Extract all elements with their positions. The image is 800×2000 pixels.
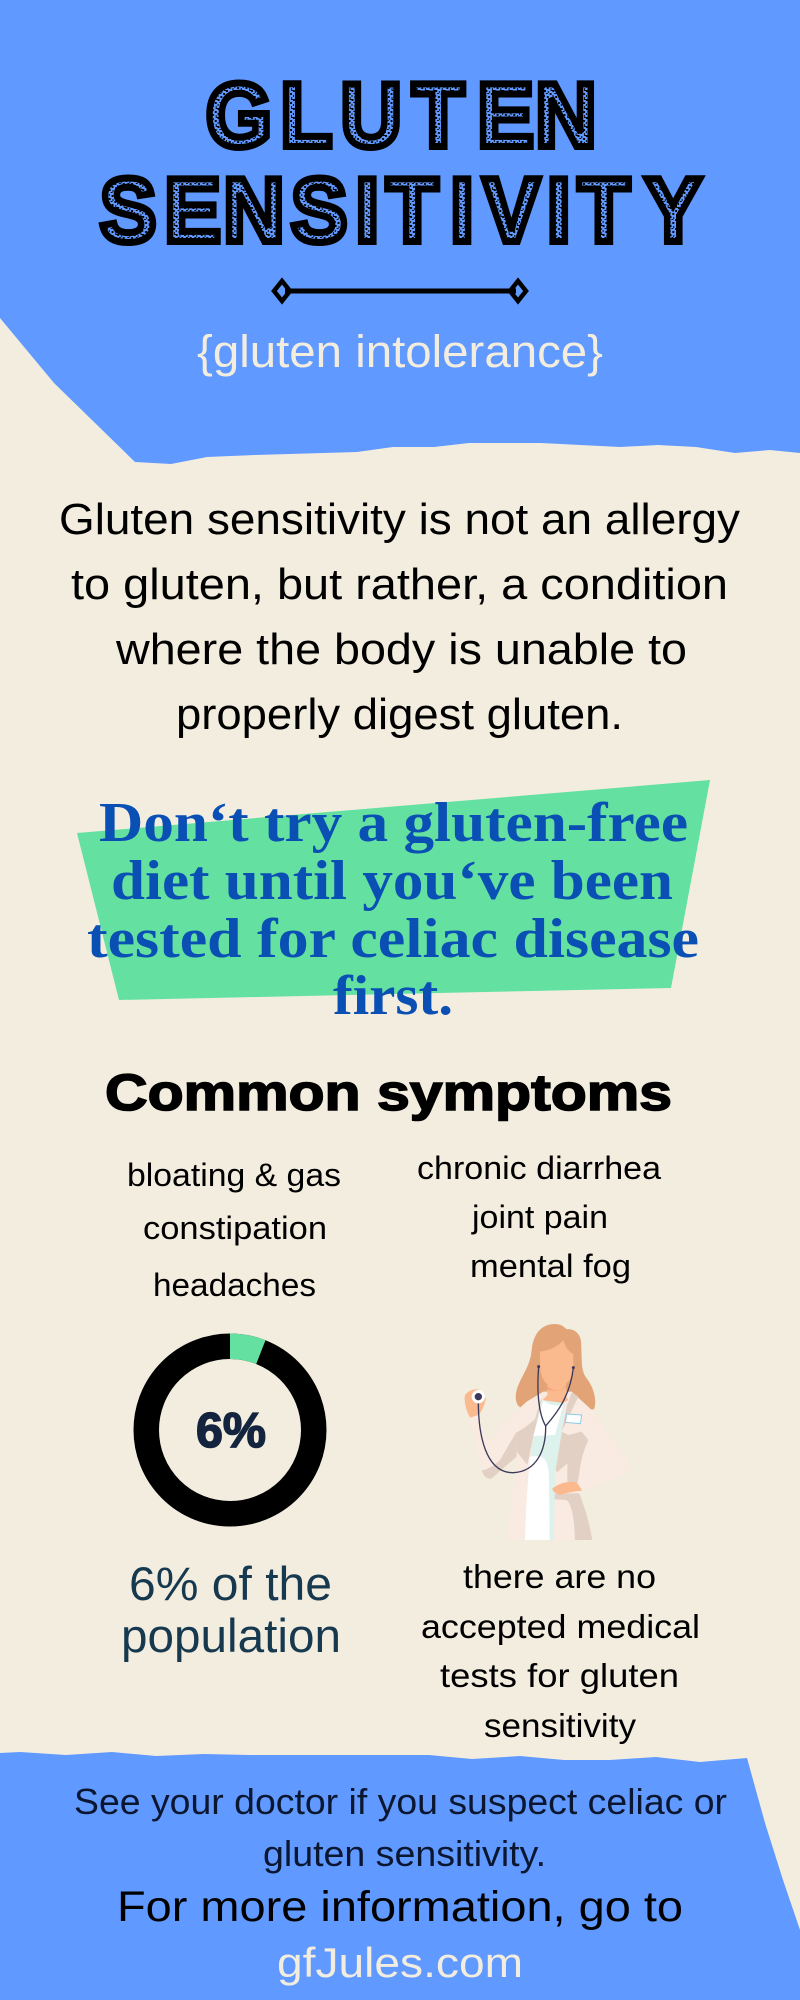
symptom list right: chronic diarrhea — [417, 1150, 661, 1186]
text block: intro paragraph: where the body is unable to — [115, 625, 687, 674]
callout text: diet until you‘ve been — [111, 850, 673, 912]
panel: green callout background — [77, 780, 710, 1000]
footer link text: gfJules.com — [277, 1939, 523, 1986]
title: SENSITIVITY — [100, 159, 701, 261]
icon: doctor with stethoscope — [465, 1324, 631, 1540]
divider with diamonds — [274, 281, 526, 301]
shirt white — [533, 1401, 563, 1436]
panel: header blue torn shape — [0, 0, 800, 464]
footer call to action: For more information, go to — [117, 1883, 683, 1931]
symptom list right: joint pain — [471, 1199, 608, 1235]
symptom list right: mental fog — [470, 1248, 631, 1284]
symptom list left: headaches — [153, 1267, 316, 1303]
hair — [516, 1324, 595, 1409]
donut chart: 6 percent — [146, 1334, 314, 1514]
subtitle: {gluten intolerance} — [197, 326, 603, 377]
raised hand — [465, 1389, 486, 1418]
callout text: tested for celiac disease — [87, 908, 699, 970]
symptom list left: constipation — [143, 1210, 327, 1246]
symptom list right — [417, 1150, 661, 1284]
panel: footer blue torn shape — [0, 1752, 800, 2000]
text block: intro paragraph: to gluten, but rather, a condition — [71, 560, 728, 609]
badge — [565, 1414, 582, 1424]
shirt mint — [525, 1400, 565, 1540]
symptom list left: bloating & gas — [127, 1157, 341, 1193]
text block: no accepted tests: sensitivity — [484, 1707, 637, 1744]
footer note: See your doctor if you suspect celiac or — [74, 1781, 727, 1822]
face — [540, 1340, 573, 1388]
title: GLUTEN — [206, 64, 597, 166]
coat shadows — [482, 1432, 517, 1479]
donut chart: 6 percent: 6% — [196, 1404, 266, 1458]
coat — [470, 1392, 631, 1540]
text block: no accepted tests: accepted medical — [421, 1608, 700, 1645]
footer note: gluten sensitivity. — [263, 1833, 546, 1874]
stethoscope — [478, 1367, 573, 1473]
text block: no accepted tests: tests for gluten — [440, 1657, 679, 1694]
footer note — [74, 1781, 727, 1874]
text block: intro paragraph: Gluten sensitivity is not an allergy — [59, 495, 740, 544]
text block: no accepted tests: there are no — [463, 1558, 656, 1595]
caption: 6% of the population: population — [121, 1609, 341, 1662]
text block: intro paragraph — [59, 495, 740, 739]
callout text: first. — [333, 965, 453, 1027]
callout text — [87, 792, 699, 1027]
heading: common symptoms: Common symptoms — [105, 1064, 672, 1121]
title — [100, 64, 701, 261]
caption: 6% of the population — [121, 1557, 341, 1662]
text block: intro paragraph: properly digest gluten. — [176, 690, 623, 739]
neck — [543, 1382, 568, 1407]
text block: no accepted tests — [421, 1558, 700, 1744]
caption: 6% of the population: 6% of the — [129, 1557, 332, 1610]
callout text: Don‘t try a gluten-free — [99, 792, 688, 854]
symptom list left — [127, 1157, 341, 1303]
hip hand — [552, 1482, 582, 1495]
